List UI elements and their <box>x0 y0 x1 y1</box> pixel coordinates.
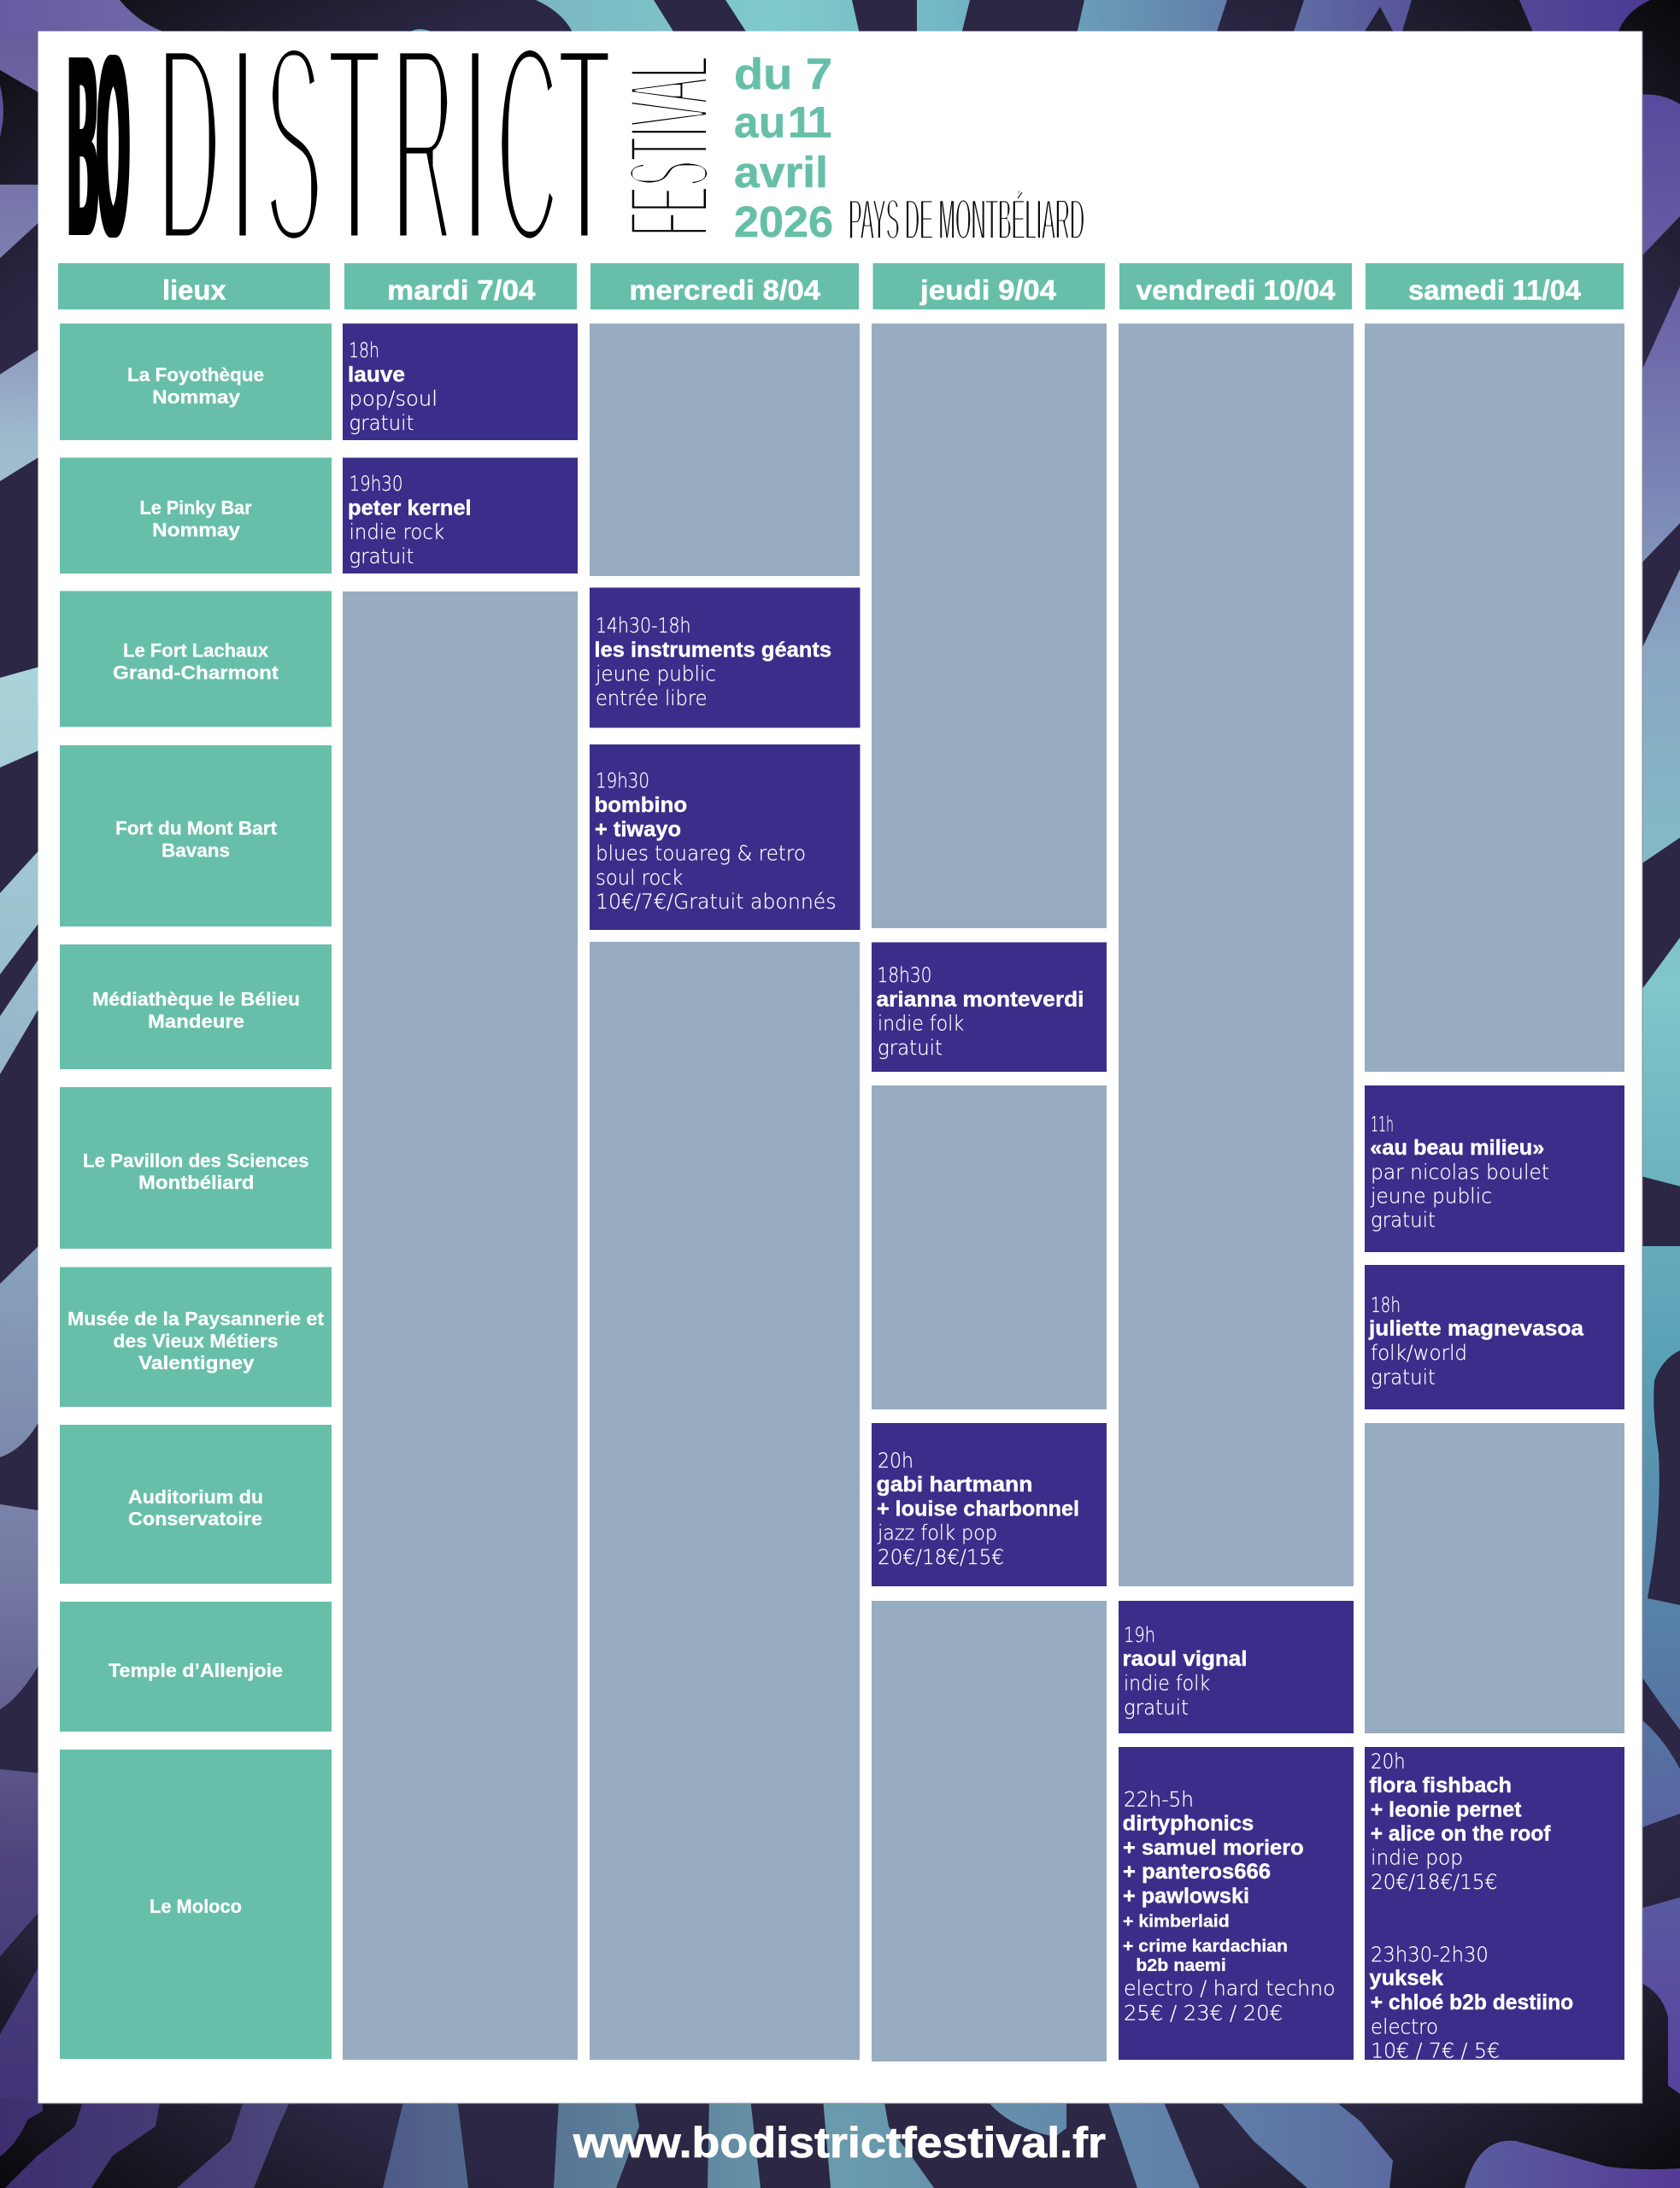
event: bombino + tiwayo: blues touareg & retro <box>596 842 806 866</box>
event: les instruments géants: 14h30-18h <box>596 614 690 638</box>
venues column: Mandeure <box>148 1010 244 1032</box>
event: peter kernel: 19h30 <box>349 472 403 496</box>
table header row: vendredi 10/04 <box>1137 275 1336 306</box>
venues column: Grand-Charmont <box>113 662 279 684</box>
event: bombino + tiwayo: bombino <box>595 793 687 817</box>
location <box>849 187 1084 252</box>
event: raoul vignal: gratuit <box>1124 1696 1189 1720</box>
venues column: Nommay <box>152 520 241 540</box>
event: juliette magnevasoa: folk/world <box>1371 1341 1467 1365</box>
event: dirtyphonics lineup: + kimberlaid <box>1123 1913 1230 1932</box>
event: au beau milieu: 11h <box>1371 1112 1394 1136</box>
event: flora fishbach and yuksek: yuksek <box>1369 1967 1443 1991</box>
venues column: Le Fort Lachaux <box>123 640 269 662</box>
venues column: Montbéliard <box>138 1172 255 1193</box>
footer website url: www.bodistrictfestival.fr <box>573 2119 1106 2167</box>
venues column: Médiathèque le Bélieu <box>92 989 300 1010</box>
empty grey slots <box>343 323 1624 2062</box>
event: raoul vignal: 19h <box>1124 1623 1155 1647</box>
venues column: Le Pavillon des Sciences <box>83 1150 309 1171</box>
event: gabi hartmann + louise charbonnel: gabi hartmann <box>877 1473 1032 1497</box>
event: arianna monteverdi: indie folk <box>878 1012 964 1036</box>
event: gabi hartmann + louise charbonnel: 20h <box>878 1449 913 1473</box>
event: flora fishbach and yuksek: flora fishbach <box>1369 1773 1512 1797</box>
event: dirtyphonics lineup: 25€ / 23€ / 20€ <box>1124 2001 1283 2025</box>
event: dirtyphonics lineup: dirtyphonics <box>1123 1812 1254 1836</box>
event: flora fishbach and yuksek: 23h30-2h30 <box>1371 1943 1489 1967</box>
event: juliette magnevasoa: gratuit <box>1371 1365 1436 1389</box>
event: flora fishbach and yuksek: indie pop <box>1371 1846 1463 1870</box>
venues column: Bavans <box>162 839 230 862</box>
event: flora fishbach and yuksek: 20€/18€/15€ <box>1371 1870 1497 1894</box>
event: flora fishbach and yuksek: + leonie pernet <box>1371 1797 1522 1821</box>
event: au beau milieu: jeune public <box>1370 1185 1492 1209</box>
event: bombino + tiwayo: + tiwayo <box>595 817 681 841</box>
table header row <box>58 263 1624 309</box>
event: juliette magnevasoa: juliette magnevasoa <box>1368 1317 1584 1341</box>
event: arianna monteverdi: 18h30 <box>877 963 931 987</box>
logo: BO: BO <box>68 1 129 290</box>
event: au beau milieu: «au beau milieu» <box>1370 1136 1544 1160</box>
logo: FESTIVAL vertical: FESTIVAL <box>603 56 735 236</box>
event: au beau milieu: gratuit <box>1371 1209 1436 1232</box>
event: juliette magnevasoa <box>1365 1265 1624 1409</box>
event: peter kernel <box>343 458 578 573</box>
event: dirtyphonics lineup: b2b naemi <box>1136 1956 1226 1975</box>
venues column: Fort du Mont Bart <box>115 818 278 839</box>
table header row: lieux <box>162 275 226 306</box>
event: bombino + tiwayo <box>590 744 860 930</box>
event: raoul vignal <box>1119 1601 1354 1733</box>
venues column: Musée de la Paysannerie et <box>68 1309 325 1330</box>
venues column: Temple d’Allenjoie <box>109 1660 283 1681</box>
venues column: Conservatoire <box>128 1509 262 1530</box>
event: les instruments géants: entrée libre <box>596 686 708 710</box>
event: flora fishbach and yuksek: + chloé b2b destiino <box>1371 1991 1573 2014</box>
event: dirtyphonics lineup: + panteros666 <box>1123 1860 1271 1884</box>
event: bombino + tiwayo: soul rock <box>596 866 683 890</box>
event: arianna monteverdi: arianna monteverdi <box>877 987 1084 1011</box>
event: arianna monteverdi <box>872 942 1107 1072</box>
event: les instruments géants <box>590 588 860 728</box>
dates: 2026 <box>734 197 833 246</box>
event: dirtyphonics lineup: electro / hard techno <box>1124 1976 1336 2000</box>
event: lauve: 18h <box>349 338 379 362</box>
event: peter kernel: peter kernel <box>348 496 472 520</box>
event: dirtyphonics lineup <box>1119 1747 1354 2060</box>
venues column: Le Moloco <box>150 1896 242 1917</box>
event: juliette magnevasoa: 18h <box>1371 1293 1401 1317</box>
venues column: Auditorium du <box>128 1486 263 1508</box>
table header row: mercredi 8/04 <box>629 275 820 306</box>
text: PAYS DE MONTBÉLIARD <box>849 187 1084 252</box>
event: peter kernel: gratuit <box>349 544 414 568</box>
event: flora fishbach and yuksek: 10€ / 7€ / 5€ <box>1371 2038 1500 2062</box>
venues column: Nommay <box>152 386 241 408</box>
event: bombino + tiwayo: 19h30 <box>596 769 649 793</box>
event: gabi hartmann + louise charbonnel <box>872 1423 1107 1586</box>
dates <box>734 50 833 246</box>
event: lauve: pop/soul <box>349 387 438 411</box>
event: lauve <box>343 323 578 440</box>
table header row: mardi 7/04 <box>387 275 536 306</box>
event: dirtyphonics lineup: + samuel moriero <box>1123 1836 1304 1860</box>
table header row: samedi 11/04 <box>1408 275 1581 306</box>
event: lauve: gratuit <box>349 411 414 435</box>
event: bombino + tiwayo: 10€/7€/Gratuit abonnés <box>596 890 837 914</box>
event: flora fishbach and yuksek: 20h <box>1371 1750 1406 1773</box>
event: peter kernel: indie rock <box>349 521 444 544</box>
event: gabi hartmann + louise charbonnel: 20€/18€/15€ <box>878 1545 1004 1569</box>
venues column: des Vieux Métiers <box>113 1330 279 1351</box>
dates: du 7 <box>734 50 832 98</box>
event: lauve: lauve <box>348 362 405 386</box>
event: flora fishbach and yuksek: electro <box>1371 2014 1438 2038</box>
venues column: Le Pinky Bar <box>140 497 252 519</box>
venues column: Valentigney <box>138 1352 255 1373</box>
event: au beau milieu: par nicolas boulet <box>1371 1160 1549 1184</box>
event: dirtyphonics lineup: + pawlowski <box>1123 1884 1249 1908</box>
event: gabi hartmann + louise charbonnel: + louise charbonnel <box>877 1497 1079 1520</box>
event: flora fishbach and yuksek: + alice on the roof <box>1371 1821 1551 1845</box>
venues column <box>60 323 332 2059</box>
event: dirtyphonics lineup: 22h-5h <box>1124 1787 1194 1811</box>
event: raoul vignal: indie folk <box>1124 1672 1210 1696</box>
table header row: jeudi 9/04 <box>919 275 1056 306</box>
venues column: La Foyothèque <box>127 364 264 385</box>
dates: avril <box>734 148 828 197</box>
event: dirtyphonics lineup: + crime kardachian <box>1123 1937 1288 1956</box>
event: au beau milieu <box>1365 1085 1624 1252</box>
dates: au 11 <box>734 98 831 147</box>
event: gabi hartmann + louise charbonnel: jazz folk pop <box>877 1521 997 1545</box>
event: raoul vignal: raoul vignal <box>1123 1647 1248 1671</box>
event: les instruments géants: les instruments géants <box>595 638 831 662</box>
event: les instruments géants: jeune public <box>595 662 716 686</box>
event: arianna monteverdi: gratuit <box>878 1036 943 1060</box>
event: flora fishbach and yuksek <box>1365 1747 1624 2062</box>
